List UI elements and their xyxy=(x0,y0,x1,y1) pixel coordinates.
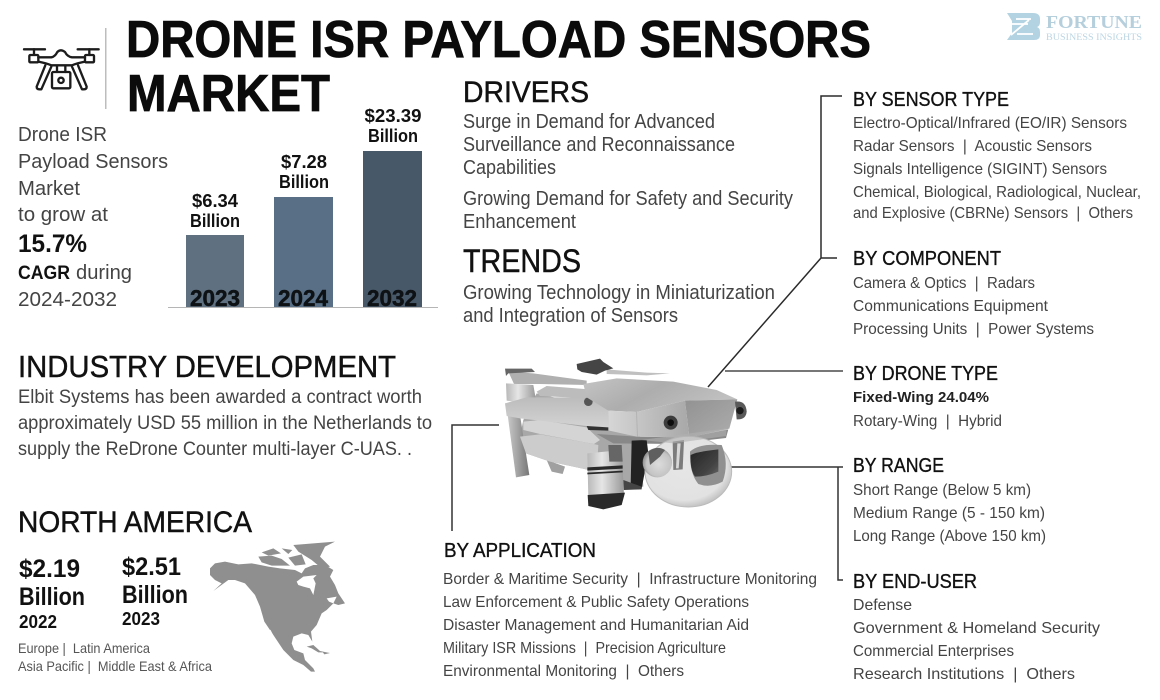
drivers: Growing Demand for Safety and Security xyxy=(463,188,793,210)
by component: Processing Units | Power Systems xyxy=(853,321,1094,338)
CAGR text block: during xyxy=(76,262,132,284)
trends: TRENDS xyxy=(463,243,581,279)
by end-user: Research Institutions | Others xyxy=(853,666,1075,683)
bar 2023: Billion xyxy=(190,211,240,231)
bar 2032: Billion xyxy=(368,126,418,146)
body side xyxy=(608,401,689,437)
by component: Communications Equipment xyxy=(853,298,1049,315)
trends: and Integration of Sensors xyxy=(463,305,678,327)
bar 2023: $6.34 xyxy=(192,191,238,211)
CAGR text block: Payload Sensors xyxy=(18,151,168,173)
CAGR text block xyxy=(18,124,168,311)
by sensor type xyxy=(853,89,1141,222)
bar 2023 xyxy=(186,191,244,311)
CAGR text block: CAGR xyxy=(18,263,70,284)
by drone type xyxy=(853,363,1002,430)
by end-user: Government & Homeland Security xyxy=(853,620,1100,637)
north america figures: NORTH AMERICA xyxy=(18,506,252,539)
by component xyxy=(853,248,1094,338)
rear propeller xyxy=(607,369,670,375)
map: North America xyxy=(210,542,345,672)
industry development: INDUSTRY DEVELOPMENT xyxy=(18,349,396,384)
left hinge cylinder xyxy=(506,383,536,403)
drone photo illustration xyxy=(505,359,747,509)
sensor lenses xyxy=(664,401,747,430)
CAGR text block: Drone ISR xyxy=(18,124,107,146)
foot xyxy=(547,460,565,474)
by application xyxy=(443,540,817,680)
logo: Fortune Business Insights: BUSINESS INSIGHTS xyxy=(1046,33,1142,43)
by drone type: BY DRONE TYPE xyxy=(853,363,998,385)
by application: Environmental Monitoring | Others xyxy=(443,663,684,680)
connector: range and end-user xyxy=(731,467,843,580)
north america figures: Billion xyxy=(19,583,85,611)
battery motor xyxy=(587,450,624,497)
trends xyxy=(463,243,775,327)
upper shoulder xyxy=(537,386,597,398)
CAGR text block: Market xyxy=(18,178,80,200)
body front face xyxy=(685,399,737,437)
bar 2032: 2032 xyxy=(367,285,417,311)
bar 2024: 2024 xyxy=(278,285,328,311)
divider line beside title xyxy=(105,28,106,109)
base silhouette xyxy=(520,393,643,490)
industry development: Elbit Systems has been awarded a contract worth xyxy=(18,387,422,408)
bar 2023: 2023 xyxy=(190,285,240,311)
industry development: supply the ReDrone Counter multi-layer C-UAS. . xyxy=(18,439,412,460)
by sensor type: Chemical, Biological, Radiological, Nuclear, xyxy=(853,184,1141,201)
by end-user: Commercial Enterprises xyxy=(853,643,1014,660)
bar chart xyxy=(168,106,438,311)
north america figures: 2022 xyxy=(19,612,57,632)
north america figures: $2.51 xyxy=(122,553,181,581)
dark strut xyxy=(631,440,648,488)
by component: Camera & Optics | Radars xyxy=(853,275,1035,292)
bar 2032 xyxy=(363,106,422,311)
by sensor type: Electro-Optical/Infrared (EO/IR) Sensors xyxy=(853,115,1127,132)
industry development xyxy=(18,349,432,460)
north america figures: 2023 xyxy=(122,609,160,629)
rear leg xyxy=(508,415,529,477)
by end-user xyxy=(853,571,1100,683)
body top xyxy=(583,378,737,412)
by end-user: BY END-USER xyxy=(853,571,977,593)
bar 2024: $7.28 xyxy=(281,152,327,172)
north america figures: Asia Pacific | Middle East & Africa xyxy=(18,658,212,674)
icon: quadcopter drone with camera xyxy=(24,49,99,89)
industry development: approximately USD 55 million in the Netherlands to xyxy=(18,413,432,434)
north america figures xyxy=(18,506,252,674)
lower arms xyxy=(520,434,598,472)
by application: Border & Maritime Security | Infrastructure Monitoring xyxy=(443,571,817,588)
bar 2032: $23.39 xyxy=(364,106,422,126)
north america figures: $2.19 xyxy=(19,555,80,583)
north america figures: Europe | Latin America xyxy=(18,640,150,656)
by drone type: Fixed-Wing 24.04% xyxy=(853,389,989,406)
by application: Military ISR Missions | Precision Agriculture xyxy=(443,640,726,657)
title xyxy=(126,11,871,123)
by drone type: Rotary-Wing | Hybrid xyxy=(853,413,1002,430)
trends: Growing Technology in Miniaturization xyxy=(463,282,775,304)
connector: application xyxy=(452,425,499,531)
bar 2024: Billion xyxy=(279,172,329,192)
front-left propeller xyxy=(508,372,587,385)
connector: drone type xyxy=(725,370,843,372)
connector: sensor type and component bracket to drone xyxy=(708,96,842,387)
main fold arm xyxy=(505,397,610,431)
by sensor type: Signals Intelligence (SIGINT) Sensors xyxy=(853,161,1107,178)
logo: Fortune Business Insights: FORTUNE xyxy=(1046,12,1142,32)
north america figures: Billion xyxy=(122,581,188,609)
title: MARKET xyxy=(127,65,330,123)
by range: BY RANGE xyxy=(853,455,944,477)
title: DRONE ISR PAYLOAD SENSORS xyxy=(126,11,871,69)
by range: Medium Range (5 - 150 km) xyxy=(853,505,1045,522)
by application: BY APPLICATION xyxy=(444,540,596,562)
bar 2024 xyxy=(274,152,333,311)
by range: Long Range (Above 150 km) xyxy=(853,528,1046,545)
by end-user: Defense xyxy=(853,597,912,614)
by sensor type: Radar Sensors | Acoustic Sensors xyxy=(853,138,1092,155)
by range: Short Range (Below 5 km) xyxy=(853,482,1031,499)
CAGR text block: 2024-2032 xyxy=(18,289,117,311)
drivers xyxy=(463,76,793,233)
logo: Fortune Business Insights xyxy=(1007,12,1142,43)
by application: Disaster Management and Humanitarian Aid xyxy=(443,617,749,634)
underside xyxy=(597,429,728,444)
by range xyxy=(853,455,1046,545)
by component: BY COMPONENT xyxy=(853,248,1001,270)
by sensor type: and Explosive (CBRNe) Sensors | Others xyxy=(853,205,1133,222)
drivers: DRIVERS xyxy=(463,76,589,109)
CAGR text block: 15.7% xyxy=(18,230,87,258)
drivers: Capabilities xyxy=(463,157,556,179)
by sensor type: BY SENSOR TYPE xyxy=(853,89,1009,111)
drivers: Surge in Demand for Advanced xyxy=(463,111,715,133)
drivers: Surveillance and Reconnaissance xyxy=(463,134,735,156)
camera dome and gimbal xyxy=(645,436,732,507)
CAGR text block: to grow at xyxy=(18,204,108,226)
by application: Law Enforcement & Public Safety Operations xyxy=(443,594,749,611)
drivers: Enhancement xyxy=(463,211,576,233)
